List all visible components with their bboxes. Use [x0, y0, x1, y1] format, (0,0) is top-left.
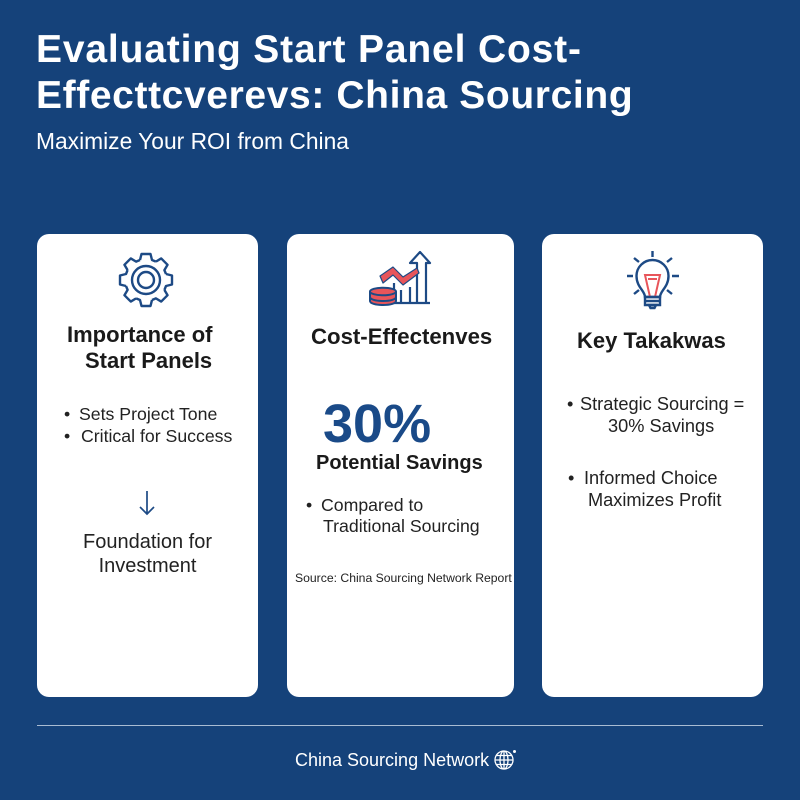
bullet one: Strategic Sourcing = — [580, 394, 744, 414]
bullet text — [306, 495, 480, 536]
stat label: Potential Savings — [316, 452, 483, 474]
heading: cost-effectenves: Cost-Effectenves — [311, 324, 492, 349]
arrow: down — [140, 491, 154, 516]
title: Effecttcverevs: China Sourcing — [36, 74, 633, 117]
stat: 30%: 30% — [323, 394, 431, 454]
bullet one: • — [567, 394, 573, 414]
bullet list: Sets Project Tone — [79, 404, 217, 424]
subtitle: Maximize Your ROI from China — [36, 128, 349, 154]
title — [36, 28, 633, 117]
heading: importance of start panels: Start Panels — [85, 348, 212, 373]
panel: importance of start panels — [37, 234, 258, 697]
heading: key takakwas: Key Takakwas — [577, 328, 726, 353]
bullet list: • — [64, 404, 70, 424]
source note: Source: China Sourcing Network Report — [295, 571, 512, 585]
panel: key takeaways — [542, 234, 763, 697]
bullet list — [64, 404, 232, 446]
bullet two: Informed Choice — [584, 468, 717, 488]
bullet two: • — [568, 468, 574, 488]
icon: light bulb — [627, 251, 679, 310]
footer: brand: China Sourcing Network — [295, 750, 489, 770]
footer divider — [37, 725, 763, 726]
bullet list: • — [64, 426, 70, 446]
icon: chart and coins — [369, 250, 432, 306]
bullet two — [568, 468, 722, 510]
bullet one — [567, 394, 744, 436]
heading: importance of start panels: Importance of — [67, 322, 212, 347]
icon: gear — [118, 252, 174, 308]
foundation text: Investment — [99, 555, 196, 577]
bullet two: Maximizes Profit — [588, 490, 721, 510]
bullet text: • — [306, 495, 312, 515]
bullet text: Traditional Sourcing — [323, 516, 480, 536]
bullet text: Compared to — [321, 495, 423, 515]
icon: globe — [494, 750, 516, 770]
title: Evaluating Start Panel Cost- — [36, 28, 582, 71]
bullet one: 30% Savings — [608, 416, 714, 436]
foundation text — [83, 531, 212, 577]
panel: cost-effectiveness — [287, 234, 514, 697]
heading: importance of start panels — [67, 322, 212, 373]
foundation text: Foundation for — [83, 531, 212, 553]
bullet list: Critical for Success — [81, 426, 232, 446]
